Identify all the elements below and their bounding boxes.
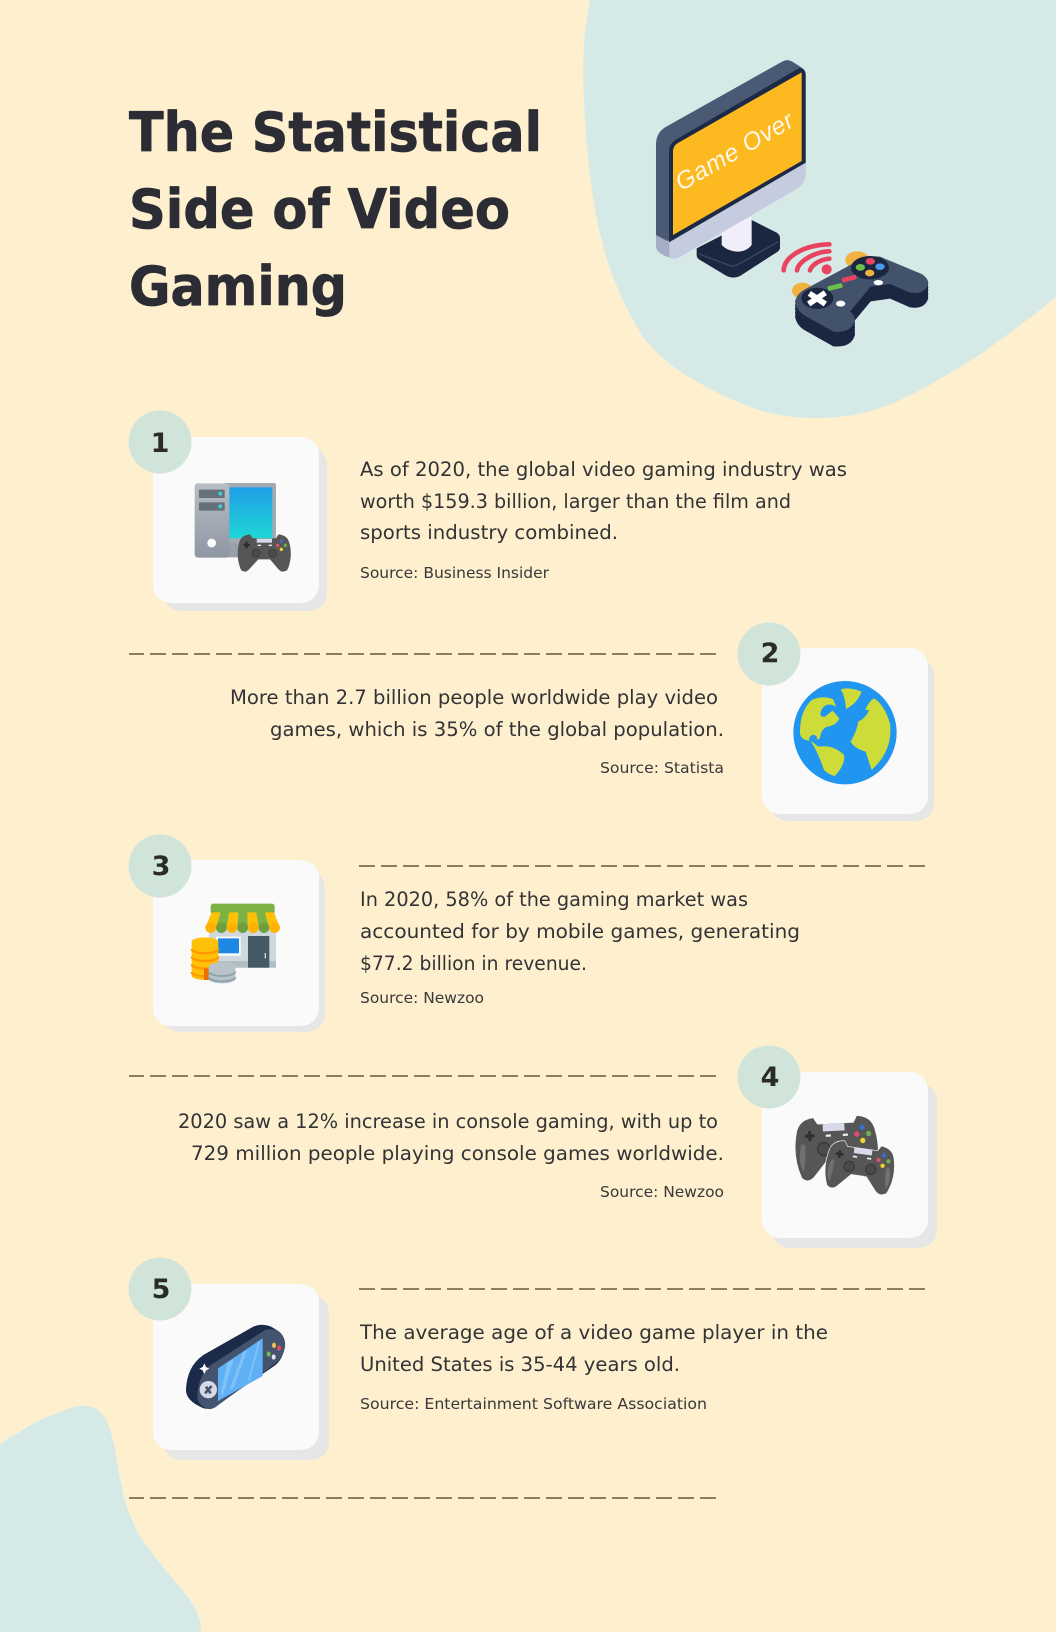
number badge 5: 5 <box>152 1274 170 1305</box>
background blob: top right <box>583 0 1056 418</box>
text: fact 4: 2020 saw a 12% increase in console gaming, with up to <box>178 1110 718 1133</box>
text: fact 1: worth $159.3 billion, larger than the film and <box>360 490 791 513</box>
text: fact 5: The average age of a video game player in the <box>359 1321 828 1344</box>
number badge 5 <box>128 1258 192 1320</box>
text: fact 5 <box>359 1321 828 1376</box>
text: fact 2: More than 2.7 billion people worldwide play video <box>230 686 718 709</box>
number badge 3: 3 <box>152 851 170 882</box>
text: fact 3: $77.2 billion in revenue. <box>360 952 587 975</box>
source 1: Source: Business Insider <box>360 564 550 582</box>
number badge 1 <box>128 410 192 474</box>
panel: item 1 <box>128 410 847 611</box>
card 5 <box>153 1284 329 1460</box>
game controller <box>792 251 928 347</box>
card 1 <box>153 437 327 611</box>
source 3: Source: Newzoo <box>360 989 484 1007</box>
monitor stand base <box>697 217 780 278</box>
background blob: bottom left <box>0 1406 201 1632</box>
title: Side of Video <box>129 178 510 241</box>
number badge 3 <box>128 834 192 898</box>
number badge 2 <box>738 622 800 686</box>
source 2: Source: Statista <box>600 759 724 777</box>
text: fact 1 <box>360 458 847 544</box>
card 3 <box>153 860 325 1032</box>
text: fact 3: In 2020, 58% of the gaming market was <box>360 888 748 911</box>
card 2 <box>762 648 934 821</box>
text: fact 4: 729 million people playing console games worldwide. <box>191 1142 724 1165</box>
icon: handheld game console <box>186 1325 285 1409</box>
icon: storefront and coins <box>192 904 280 983</box>
source 5: Source: Entertainment Software Association <box>360 1395 707 1413</box>
number badge 2: 2 <box>761 638 779 669</box>
panel: item 3 <box>128 834 800 1032</box>
monitor screen text: Game Over <box>671 106 800 197</box>
text: fact 2: games, which is 35% of the global population. <box>270 718 724 741</box>
title: Gaming <box>129 255 347 318</box>
number badge 4: 4 <box>761 1062 779 1093</box>
text: fact 4 <box>178 1110 724 1165</box>
text: fact 1: As of 2020, the global video gaming industry was <box>360 458 847 481</box>
number badge 4 <box>738 1046 800 1108</box>
icon: desktop computer with gamepad <box>195 483 291 572</box>
text: fact 1: sports industry combined. <box>360 521 618 544</box>
panel: item 2 <box>230 622 934 821</box>
text: fact 2 <box>230 686 724 741</box>
card 4 <box>762 1072 937 1248</box>
text: fact 3 <box>360 888 800 975</box>
icon: two game controllers <box>794 1115 897 1196</box>
title <box>129 101 542 318</box>
panel: item 4 <box>178 1046 937 1248</box>
text: fact 5: United States is 35-44 years old. <box>360 1353 680 1376</box>
title: The Statistical <box>129 101 542 164</box>
monitor body <box>656 60 806 259</box>
number badge 1: 1 <box>151 428 169 459</box>
source 4: Source: Newzoo <box>600 1183 724 1201</box>
text: fact 3: accounted for by mobile games, generating <box>360 920 800 943</box>
wifi signal icon <box>784 244 832 274</box>
illustration: monitor and wireless controller <box>656 60 928 347</box>
panel: item 5 <box>128 1258 828 1460</box>
icon: globe <box>793 681 897 784</box>
